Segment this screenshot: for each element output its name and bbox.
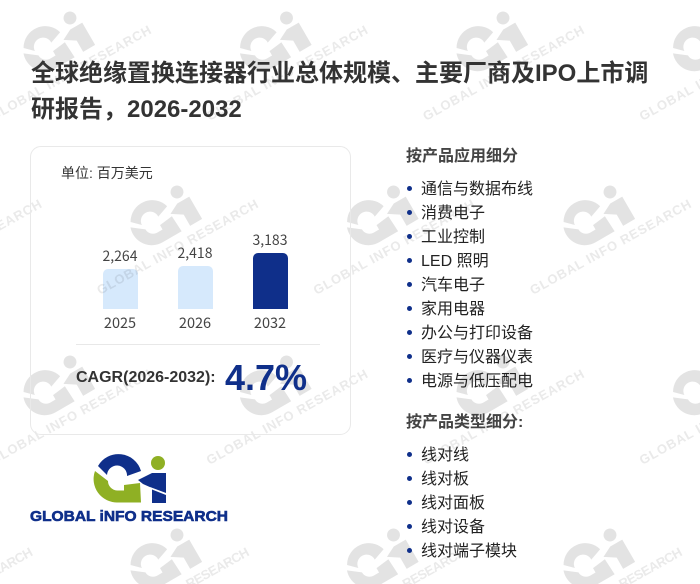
unit label: 单位: 百万美元 xyxy=(61,165,153,181)
item: 消费电子 xyxy=(421,205,485,222)
item: 线对板 xyxy=(421,471,469,488)
value 2025: 2,264 xyxy=(102,246,137,266)
watermark pattern: GLOBAL INFO RESEARCH xyxy=(311,196,477,298)
watermark pattern: GLOBAL INFO RESEARCH xyxy=(420,366,587,468)
item: 汽车电子 xyxy=(421,277,485,294)
value 2026: 2,418 xyxy=(178,243,212,263)
bar 2026 xyxy=(178,266,213,309)
watermark pattern: GLOBAL INFO RESEARCH xyxy=(420,22,587,124)
item: 家用电器 xyxy=(421,301,485,318)
item: 医疗与仪器仪表 xyxy=(421,349,533,366)
item: 电源与低压配电 xyxy=(421,373,533,390)
heading: by application: 按产品应用细分 xyxy=(406,148,518,165)
watermark pattern: GLOBAL INFO RESEARCH xyxy=(527,196,694,298)
item: 工业控制 xyxy=(421,229,485,246)
year 2025: 2025 xyxy=(104,312,136,333)
heading: by product type: 按产品类型细分: xyxy=(406,414,523,431)
logo wordmark: GLOBAL iNFO RESEARCH xyxy=(30,509,228,525)
bar chart xyxy=(102,230,288,333)
item: 线对面板 xyxy=(421,495,485,512)
panel: market size card xyxy=(30,146,351,435)
watermark pattern: GLOBAL INFO RESEARCH xyxy=(204,366,370,468)
CAGR label: CAGR(2026-2032): xyxy=(76,369,216,386)
title: 研报告，2026-2032 xyxy=(31,96,242,123)
list: product types xyxy=(407,446,517,560)
value 2032: 3,183 xyxy=(252,230,287,250)
item: 线对线 xyxy=(421,447,469,464)
bar 2032 xyxy=(253,253,288,309)
bar 2025 xyxy=(103,269,138,309)
logo: Global Info Research xyxy=(30,454,228,525)
year 2026: 2026 xyxy=(179,312,211,333)
item: LED 照明 xyxy=(421,253,489,270)
CAGR value: 4.7% xyxy=(225,357,307,398)
item: 通信与数据布线 xyxy=(421,181,533,198)
item: 线对设备 xyxy=(421,519,485,536)
item: 办公与打印设备 xyxy=(421,325,533,342)
title xyxy=(31,60,648,123)
item: 线对端子模块 xyxy=(421,543,517,560)
list: applications xyxy=(407,180,533,390)
title: 全球绝缘置换连接器行业总体规模、主要厂商及IPO上市调 xyxy=(31,60,648,87)
icon: Gi mark xyxy=(94,454,166,503)
watermark pattern: GLOBAL INFO RESEARCH xyxy=(204,22,370,124)
year 2032: 2032 xyxy=(254,312,286,333)
watermark pattern: GLOBAL INFO RESEARCH xyxy=(94,196,261,298)
